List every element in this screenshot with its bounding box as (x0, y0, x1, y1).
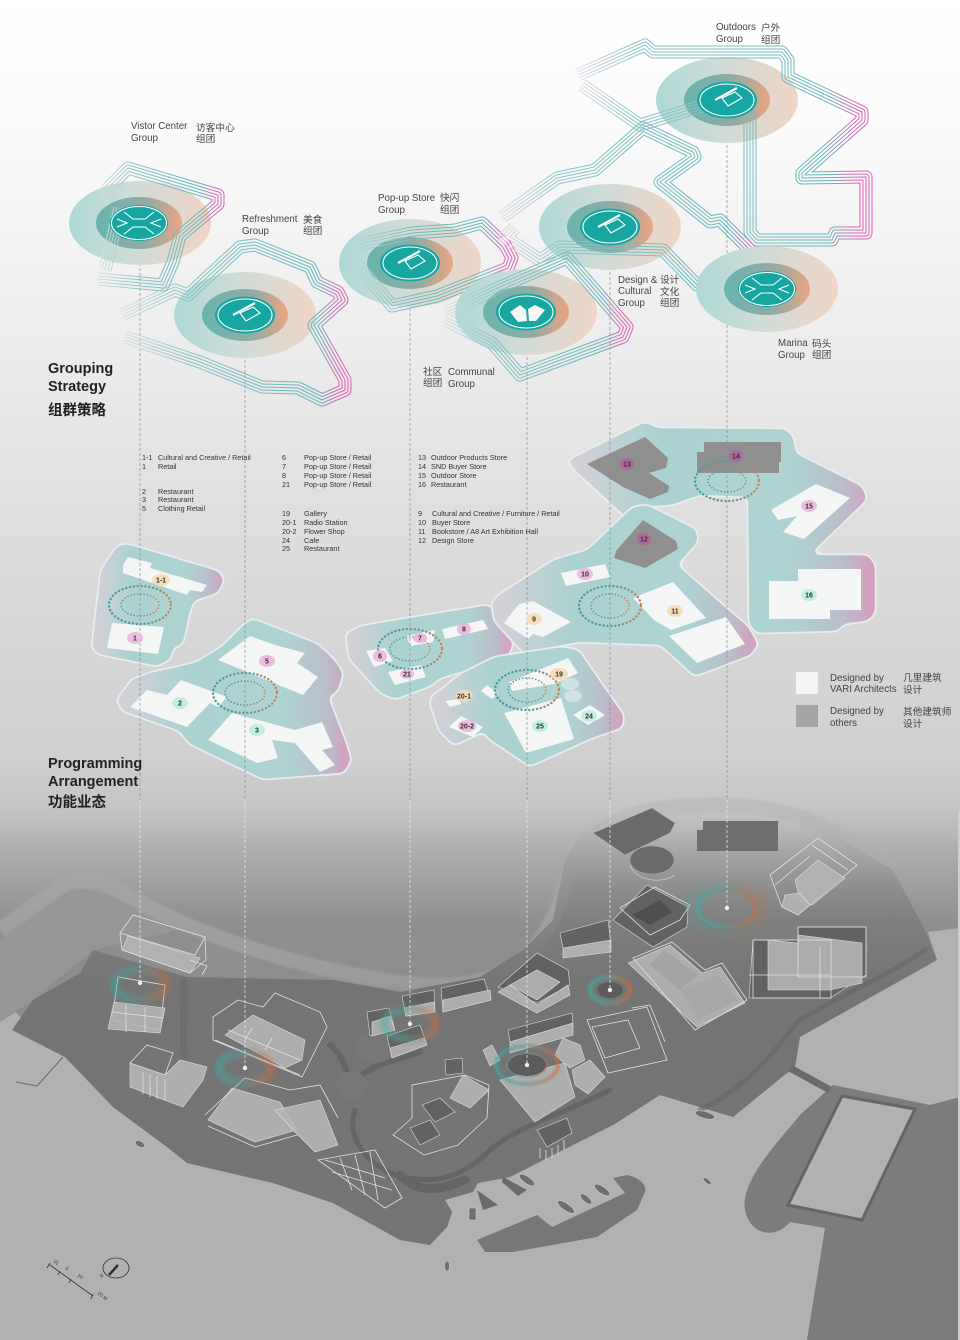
label: Visitor Center group: Vistor Center (131, 121, 188, 132)
blob: 6, 7, 8 and 21 (347, 606, 512, 698)
program list: column 1: Clothing Retail (158, 504, 206, 513)
group: Outdoors hub (576, 38, 872, 246)
number badges: 15 (805, 504, 813, 510)
number badges (127, 450, 817, 736)
program list: column 1: Cultural and Creative / Retail (158, 453, 251, 462)
label: Visitor Center group: Group (131, 133, 158, 144)
number badges: 1 (133, 636, 137, 642)
label: Marina group: Group (778, 350, 805, 361)
map: scale bar and north arrow (47, 1258, 129, 1302)
program list: column 1 (142, 453, 251, 513)
map: scale bar and north arrow: 10 (76, 1273, 84, 1281)
number badges: 21 (403, 672, 411, 678)
label: Design and Cultural group: 文化 (660, 285, 680, 298)
program list: column 3 (418, 453, 560, 545)
program list: column 2: Pop-up Store / Retail (304, 480, 372, 489)
program list: column 3: 13 (418, 453, 426, 462)
legend (796, 671, 952, 730)
legend: VARI Architects (830, 684, 897, 695)
label: Pop-up Store group: 组团 (440, 203, 459, 216)
label: Refreshment group (242, 213, 323, 237)
number badges: 11 (671, 608, 679, 616)
program list: column 3: SND Buyer Store (431, 462, 487, 471)
map: dark ring centers (508, 982, 623, 1076)
program list: column 3: 9 (418, 509, 422, 518)
program list: column 3: 16 (418, 480, 426, 489)
number badges: 16 (805, 592, 813, 600)
map: bottom island (477, 1175, 645, 1252)
program list: column 2: Pop-up Store / Retail (304, 462, 372, 471)
group: Design and Cultural hub (498, 122, 756, 292)
program list: column 3: Restaurant (431, 480, 466, 489)
map: left shore ground (0, 885, 200, 1022)
legend: 设计 (903, 683, 923, 696)
map: scale bar and north arrow: 5 (64, 1266, 70, 1272)
building: 9 and 11 (628, 942, 747, 1030)
map: boats (134, 1109, 716, 1271)
blob: 1 and 1-1 (93, 545, 223, 665)
label: Outdoors group: Group (716, 34, 743, 45)
map: scale bar and north arrow: 20 M (96, 1291, 108, 1302)
program list: column 3: Design Store (432, 536, 474, 545)
number badges: 7 (418, 636, 422, 642)
number badges: 8 (462, 626, 466, 634)
number badges: 24 (585, 714, 593, 720)
legend: 其他建筑师 (903, 705, 952, 718)
label: Refreshment group: Group (242, 226, 269, 237)
heading: Programming Arrangement: Programming (48, 756, 142, 772)
map: right edge strip (958, 810, 960, 1340)
program list: column 3: 11 (418, 527, 426, 536)
program list: column 1: 1 (142, 462, 146, 471)
building: restaurant 25 (483, 1013, 605, 1122)
map: small pier (16, 1057, 63, 1086)
number badges: 19 (555, 672, 563, 678)
program list: column 3: Buyer Store (432, 518, 470, 527)
program list: column 3: Outdoor Products Store (431, 453, 507, 462)
program list: column 1: 1-1 (142, 453, 152, 462)
label: Marina group (778, 338, 832, 361)
program list: column 2: Pop-up Store / Retail (304, 453, 372, 462)
heading: Grouping Strategy: Strategy (48, 379, 106, 395)
map: scale bar and north arrow: 01 (52, 1259, 60, 1267)
building: north block (560, 920, 611, 958)
building wireframes (108, 808, 866, 1208)
label: Design and Cultural group: Cultural (618, 286, 651, 297)
number badges: 1-1 (156, 578, 166, 584)
building: gallery 19 (498, 953, 570, 1013)
building: restaurant 5 (213, 993, 327, 1077)
number badges: 25 (536, 724, 544, 730)
blob: 2, 3 and 5 (118, 620, 350, 778)
program list: column 2: Flower Shop (304, 527, 345, 536)
heading: Grouping Strategy: Grouping (48, 361, 113, 377)
number badges: 14 (732, 454, 740, 460)
number badges: 20-2 (460, 724, 474, 730)
program list: column 2: 25 (282, 544, 290, 553)
label: Pop-up Store group: 快闪 (440, 191, 459, 204)
program list: column 3: 14 (418, 462, 426, 471)
program list: column 3: 12 (418, 536, 426, 545)
building: pergola (318, 1150, 402, 1208)
program list: column 3: Outdoor Store (431, 471, 477, 480)
label: Visitor Center group: 访客中心 (196, 121, 235, 134)
label: Pop-up Store group: Pop-up Store (378, 193, 435, 204)
map: water (0, 928, 960, 1340)
map: dock and breakwater (745, 1085, 960, 1340)
label: Outdoors group: 户外 (761, 21, 781, 34)
number badges: 3 (255, 728, 259, 734)
label: Design and Cultural group: Group (618, 298, 645, 309)
program list: column 2: Pop-up Store / Retail (304, 471, 372, 480)
map: scale bar and north arrow: N (98, 1273, 105, 1280)
program list: column 2: Restaurant (304, 544, 339, 553)
label: Marina group: 码头 (812, 338, 832, 350)
program list: column 2: 7 (282, 462, 286, 471)
map: lawns (337, 1031, 395, 1099)
number badges: 5 (265, 658, 269, 666)
program list: column 2: Cafe (304, 536, 319, 545)
blob: 9, 10, 11 and 12 (493, 506, 757, 675)
building: restaurants 2 and 3 (205, 1078, 338, 1152)
legend: 几里建筑 (903, 671, 942, 684)
map: dock basin (788, 1096, 915, 1220)
number badges: 9 (532, 616, 536, 624)
group: Visitor Center hub (69, 162, 224, 292)
building: pop-up stores (367, 979, 491, 1075)
heading: Grouping Strategy: 组群策略 (48, 401, 106, 419)
number badges: 20-1 (457, 694, 471, 700)
program list: column 1: 3 (142, 495, 146, 504)
map: land mass (12, 800, 937, 1245)
building: 13 (593, 808, 675, 880)
program list: column 1: 5 (142, 504, 146, 513)
building: 16 (749, 927, 866, 998)
label: Communal group: Group (448, 379, 475, 390)
program list: column 2: 19 (282, 509, 290, 518)
program list: column 1: Retail (158, 462, 177, 471)
group: Marina hub (696, 246, 838, 332)
map: road band (0, 805, 895, 986)
program list: column 3: Cultural and Creative / Furniture / Retail (432, 509, 560, 518)
heading: Programming Arrangement (48, 756, 142, 811)
label: Pop-up Store group: Group (378, 205, 405, 216)
program list: column 2: Gallery (304, 509, 327, 518)
label: Visitor Center group: 组团 (196, 132, 215, 145)
label: Design and Cultural group: 设计 (660, 273, 680, 286)
building: west block (108, 977, 165, 1033)
label: Design and Cultural group (618, 273, 680, 309)
label: Outdoors group: 组团 (761, 33, 780, 46)
label: Outdoors group: Outdoors (716, 22, 756, 33)
label: Refreshment group: 美食 (303, 213, 323, 226)
legend: Designed by (830, 673, 884, 684)
panel: programming blobs (93, 423, 874, 778)
building: 12 (613, 885, 690, 947)
map: colored location rings (114, 881, 766, 1084)
building: 14 (697, 821, 778, 851)
label: Marina group: 组团 (812, 348, 831, 361)
program list: column 1: Restaurant (158, 495, 193, 504)
blob: 19, 20, 24 and 25 (431, 648, 623, 765)
label: Outdoors group (716, 21, 781, 46)
label: Pop-up Store group (378, 191, 459, 216)
program list: column 2: 6 (282, 453, 286, 462)
program list: column 2 (282, 453, 372, 553)
program list: column 2: 8 (282, 471, 286, 480)
dotted location rings (109, 461, 759, 713)
program list: column 2: 21 (282, 480, 290, 489)
label: Communal group: 组团 (423, 376, 442, 389)
label: Marina group: Marina (778, 338, 808, 349)
building: central villa (393, 1075, 489, 1155)
label: Communal group: 社区 (423, 365, 443, 378)
number badges: 12 (640, 536, 648, 544)
heading: Programming Arrangement: 功能业态 (48, 793, 106, 811)
group: Refreshment hub (120, 238, 352, 406)
legend: 设计 (903, 717, 923, 730)
program list: column 2: 20-1 (282, 518, 297, 527)
blob: 13, 14, 15 and 16 (569, 423, 874, 632)
building: south-west house (130, 1045, 207, 1107)
number badges: 6 (378, 654, 382, 660)
map: dark rivers (181, 950, 925, 1189)
group: Communal hub (442, 252, 634, 382)
legend: others (830, 718, 857, 729)
site map: aerial axonometric (0, 800, 960, 1340)
map: dock connector (790, 1068, 830, 1090)
program list: column 2: 20-2 (282, 527, 297, 536)
number badges: 2 (178, 700, 182, 708)
legend: Designed by (830, 706, 884, 717)
program list: column 2: 24 (282, 536, 290, 545)
label: Communal group: Communal (448, 367, 495, 378)
heading: Grouping Strategy (48, 361, 113, 419)
program list: column 3: 15 (418, 471, 426, 480)
number badges: 10 (581, 572, 589, 578)
program list: column 2: Radio Station (304, 518, 348, 527)
building: north-west block (120, 915, 207, 975)
label: Refreshment group: 组团 (303, 224, 322, 237)
map: jetties (477, 1177, 527, 1210)
building: 15 (770, 838, 857, 915)
program list: column 1: Restaurant (158, 487, 193, 496)
vertical dashed connectors (138, 100, 729, 1070)
label: Design and Cultural group: 组团 (660, 296, 679, 309)
building: waterside hut (537, 1118, 572, 1160)
program list: column 3: Bookstore / A8 Art Exhibition Hall (432, 527, 538, 536)
label: Refreshment group: Refreshment (242, 214, 298, 225)
label: Communal group (423, 365, 495, 390)
label: Visitor Center group (131, 121, 235, 145)
heading: Programming Arrangement: Arrangement (48, 774, 138, 790)
program list: column 3: 10 (418, 518, 426, 527)
building: wire block 11 (587, 1005, 667, 1073)
program list: column 1: 2 (142, 487, 146, 496)
number badges: 13 (623, 462, 631, 468)
label: Design and Cultural group: Design & (618, 275, 658, 286)
group: Pop-up Store hub (339, 216, 518, 312)
